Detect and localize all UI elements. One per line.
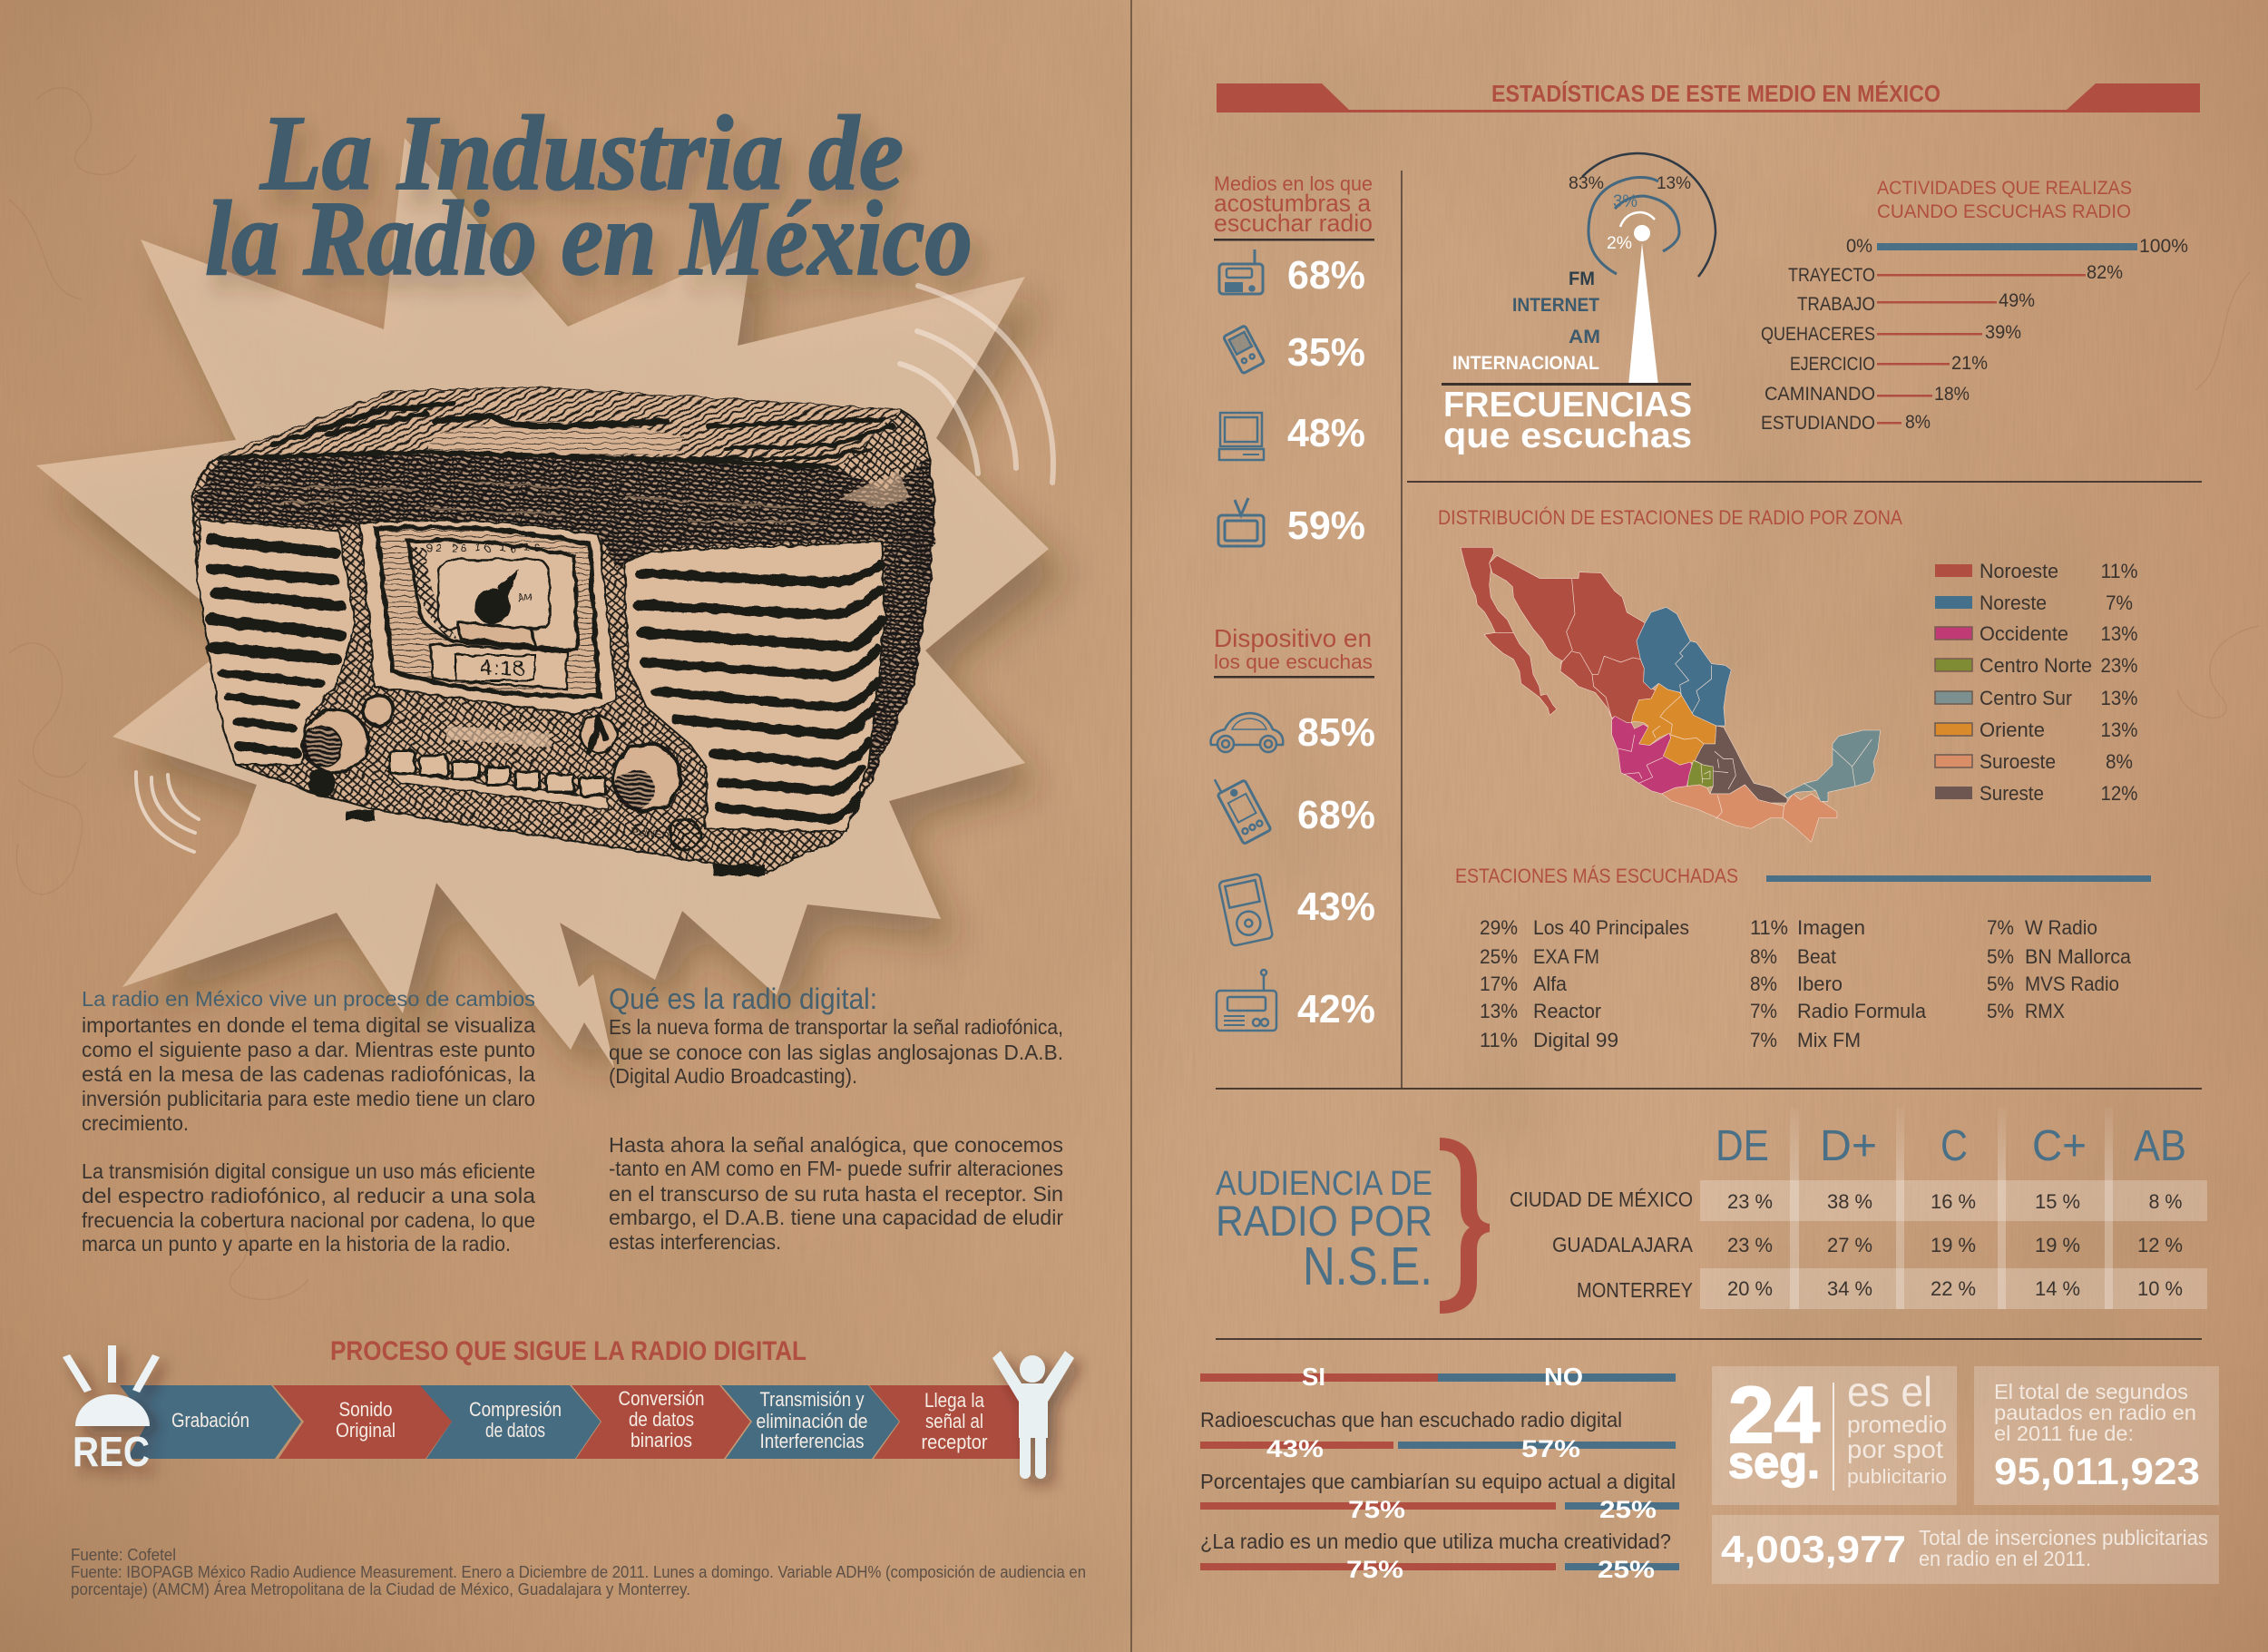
value: computer 48%: 48% xyxy=(1287,411,1365,455)
sound waves right xyxy=(900,286,1053,483)
chart: heard digital radio: Radioescuchas que han escuchado radio digital xyxy=(1200,1408,1622,1432)
map legend: Oriente xyxy=(1980,718,2045,741)
chart: frequency tower: que escuchas xyxy=(1443,416,1692,455)
callout: total insertions xyxy=(1712,1515,2219,1584)
icon: mobile xyxy=(1223,326,1265,374)
value: television 59%: 59% xyxy=(1287,503,1365,548)
chart: activities while listening: 0% xyxy=(1846,236,1872,257)
chart: would change equipment: 75% xyxy=(1348,1496,1405,1523)
map legend: Centro Norte xyxy=(1980,654,2092,677)
map legend: 23% xyxy=(2101,654,2137,677)
chart: activities while listening: CUANDO ESCUCHAS RADIO xyxy=(1877,201,2131,222)
chart: frequency tower: 83% xyxy=(1569,174,1604,193)
list: top stations: Radio Formula xyxy=(1797,1000,1927,1022)
chart: frequency tower: INTERNET xyxy=(1512,295,1599,316)
list: top stations: 25% xyxy=(1480,945,1518,968)
chart: activities while listening xyxy=(1761,178,2188,434)
map legend: 13% xyxy=(2101,718,2137,741)
callout: average seconds per spot xyxy=(1712,1366,1957,1505)
map legend: 12% xyxy=(2101,782,2137,805)
icon: REC light xyxy=(63,1345,160,1475)
callout: total seconds: El total de segundos xyxy=(1994,1380,2188,1403)
table: audience by NSE: 12 % xyxy=(2137,1234,2183,1256)
table: audience by NSE: 16 % xyxy=(1931,1190,1976,1213)
callout: average seconds per spot: promedio xyxy=(1847,1411,1947,1438)
chart: frequency tower: FM xyxy=(1569,269,1595,289)
table: audience by NSE: 14 % xyxy=(2035,1277,2080,1300)
list: top stations: 29% xyxy=(1480,916,1518,939)
list: top stations: 11% xyxy=(1750,916,1788,939)
list: top stations: 7% xyxy=(1987,916,2014,939)
heading: media xyxy=(1214,172,1374,241)
list: top stations: 13% xyxy=(1480,1000,1518,1022)
table: audience by NSE: 10 % xyxy=(2137,1277,2183,1300)
list: top stations: Imagen xyxy=(1797,916,1865,939)
heading: media: acostumbras a xyxy=(1214,190,1372,217)
chart: would change equipment: 25% xyxy=(1599,1496,1657,1523)
chart: activities while listening: 21% xyxy=(1951,353,1988,374)
callout: total insertions: Total de inserciones publicitarias xyxy=(1919,1526,2208,1549)
value: music player 43%: 43% xyxy=(1297,885,1375,929)
table: audience by NSE: 23 % xyxy=(1727,1190,1773,1213)
icon: mobile device xyxy=(1210,767,1271,844)
map legend: 11% xyxy=(2101,560,2137,582)
callout: total insertions: 4,003,977 xyxy=(1721,1528,1906,1570)
digital radio explanation: Hasta ahora la señal analógica, que conocemos xyxy=(609,1133,1063,1157)
digital radio explanation: que se conoce con las siglas anglosajonas D.A.B. xyxy=(609,1041,1063,1064)
process arrow chain: de datos xyxy=(629,1408,694,1431)
list: top stations: Mix FM xyxy=(1797,1029,1861,1051)
intro text column: La radio en México vive un proceso de cambios xyxy=(82,987,535,1011)
list: top stations: Digital 99 xyxy=(1533,1029,1618,1051)
list: top stations: Los 40 Principales xyxy=(1533,916,1689,939)
icon: portable radio xyxy=(1219,249,1263,294)
process arrow chain: Original xyxy=(336,1419,396,1442)
map legend: 13% xyxy=(2101,687,2137,709)
sources: porcentaje) (AMCM) Área Metropolitana de la Ciudad de México, Guadalajara y Monterrey. xyxy=(71,1580,690,1598)
list: top stations: 17% xyxy=(1480,973,1518,995)
icon: television xyxy=(1218,498,1264,546)
table: audience by NSE: AB xyxy=(2134,1122,2186,1170)
callout: total seconds xyxy=(1974,1366,2219,1505)
intro text column: como el siguiente paso a dar. Mientras este punto xyxy=(82,1038,535,1061)
table: audience by NSE: DE xyxy=(1716,1122,1769,1170)
value: mobile 35%: 35% xyxy=(1287,330,1365,375)
icon: brace xyxy=(1440,1138,1490,1314)
icon: computer xyxy=(1219,413,1264,460)
list: top stations: 7% xyxy=(1750,1029,1777,1051)
map legend xyxy=(1935,560,2137,805)
intro text column: crecimiento. xyxy=(82,1111,189,1135)
map legend: Suroeste xyxy=(1980,750,2056,773)
icon: music player xyxy=(1218,874,1273,946)
chart: activities while listening: ACTIVIDADES QUE REALIZAS xyxy=(1877,178,2132,199)
table: audience by NSE: 27 % xyxy=(1827,1234,1872,1256)
stats header banner: ESTADÍSTICAS DE ESTE MEDIO EN MÉXICO xyxy=(1491,80,1941,107)
heading: audience by NSE: N.S.E. xyxy=(1303,1237,1432,1296)
process arrow chain: Interferencias xyxy=(760,1430,864,1452)
icon: REC light: REC xyxy=(73,1428,150,1475)
process arrow chain xyxy=(120,1385,1020,1459)
chart: creativity xyxy=(1200,1530,1679,1583)
intro text column: del espectro radiofónico, al reducir a una sola xyxy=(82,1184,535,1207)
process arrow chain: Compresión xyxy=(469,1398,562,1421)
heading: station distribution: DISTRIBUCIÓN DE ESTACIONES DE RADIO POR ZONA xyxy=(1438,506,1902,529)
stats header banner xyxy=(1217,80,2200,112)
intro text column: frecuencia la cobertura nacional por cadena, lo que xyxy=(82,1208,535,1232)
chart: frequency tower: 3% xyxy=(1613,192,1637,211)
list: top stations: Reactor xyxy=(1533,1000,1601,1022)
chart: frequency tower xyxy=(1442,153,1716,455)
digital radio explanation: embargo, el D.A.B. tiene una capacidad de eludir xyxy=(609,1206,1063,1229)
intro text column: está en la mesa de las cadenas radiofónicas, la xyxy=(82,1062,535,1086)
title xyxy=(205,93,973,298)
chart: activities while listening: QUEHACERES xyxy=(1761,324,1875,345)
map legend: Occidente xyxy=(1980,622,2068,645)
process arrow chain: señal al xyxy=(925,1410,983,1432)
list: top stations: 5% xyxy=(1987,945,2014,968)
digital radio explanation: Qué es la radio digital: xyxy=(609,982,877,1015)
list: top stations: Alfa xyxy=(1533,973,1568,995)
list: top stations: 5% xyxy=(1987,973,2014,995)
heading: devices xyxy=(1214,624,1374,679)
illustration: vintage radio: POWER xyxy=(631,826,669,841)
table: audience by NSE: MONTERREY xyxy=(1577,1278,1693,1302)
sources: Fuente: IBOPAGB México Radio Audience Measurement. Enero a Diciembre de 2011. Lunes a domingo. Variable ADH% (composición de audiencia en xyxy=(71,1563,1086,1581)
process arrow chain: Llega la xyxy=(924,1389,985,1412)
chart: activities while listening: 82% xyxy=(2087,262,2123,283)
starburst behind radio xyxy=(36,138,1049,1068)
table: audience by NSE: 34 % xyxy=(1827,1277,1872,1300)
intro text column xyxy=(82,987,535,1256)
table: audience by NSE: 22 % xyxy=(1931,1277,1976,1300)
digital radio explanation: Es la nueva forma de transportar la señal radiofónica, xyxy=(609,1015,1063,1039)
table: audience by NSE: C+ xyxy=(2032,1122,2087,1170)
chart: creativity: 75% xyxy=(1346,1556,1403,1583)
list: top stations xyxy=(1480,916,2132,1051)
intro text column: inversión publicitaria para este medio tiene un claro xyxy=(82,1087,535,1110)
process arrow chain: Sonido xyxy=(339,1398,392,1421)
heading: audience by NSE: RADIO POR xyxy=(1216,1197,1432,1245)
value: mobile device 68%: 68% xyxy=(1297,793,1375,837)
value: car 85%: 85% xyxy=(1297,710,1375,755)
table: audience by NSE: CIUDAD DE MÉXICO xyxy=(1510,1188,1693,1211)
list: top stations: RMX xyxy=(2025,1000,2065,1022)
heading: audience by NSE xyxy=(1216,1165,1432,1296)
table: audience by NSE: 15 % xyxy=(2035,1190,2080,1213)
chart: creativity: 25% xyxy=(1598,1556,1655,1583)
list: top stations: 7% xyxy=(1750,1000,1777,1022)
chart: heard digital radio: 43% xyxy=(1266,1435,1324,1462)
table: audience by NSE: C xyxy=(1941,1122,1968,1170)
callout: average seconds per spot: por spot xyxy=(1847,1435,1943,1463)
heading: audience by NSE: AUDIENCIA DE xyxy=(1216,1165,1432,1203)
heading: devices: Dispositivo en xyxy=(1214,624,1372,652)
heading: top stations xyxy=(1455,865,2151,887)
chart: activities while listening: EJERCICIO xyxy=(1790,354,1875,375)
chart: heard digital radio xyxy=(1200,1408,1676,1462)
digital radio explanation: estas interferencias. xyxy=(609,1230,781,1254)
heading: media: escuchar radio xyxy=(1214,210,1373,237)
map legend: 8% xyxy=(2106,750,2133,773)
table: audience by NSE: 19 % xyxy=(2035,1234,2080,1256)
heading: top stations: ESTACIONES MÁS ESCUCHADAS xyxy=(1455,865,1738,887)
chart: activities while listening: 49% xyxy=(1999,290,2035,311)
table: audience by NSE: D+ xyxy=(1820,1122,1877,1170)
chart: would change equipment: Porcentajes que cambiarían su equipo actual a digital xyxy=(1200,1470,1676,1493)
table: audience by NSE: 23 % xyxy=(1727,1234,1773,1256)
chart: activities while listening: TRAYECTO xyxy=(1788,265,1875,286)
title: La Industria de xyxy=(259,93,904,212)
map legend: Centro Sur xyxy=(1980,687,2072,709)
chart: frequency tower: AM xyxy=(1569,327,1600,347)
list: top stations: 8% xyxy=(1750,945,1777,968)
chart: creativity: ¿La radio es un medio que utiliza mucha creatividad? xyxy=(1200,1530,1671,1553)
list: top stations: Ibero xyxy=(1797,973,1843,995)
callout: average seconds per spot: 24 xyxy=(1728,1370,1820,1460)
heading: media: Medios en los que xyxy=(1214,172,1373,195)
table: audience by NSE: 20 % xyxy=(1727,1277,1773,1300)
chart: yes/no legend: NO xyxy=(1544,1363,1583,1391)
illustration: vintage radio: 4:18 xyxy=(481,657,524,679)
value: table radio 42%: 42% xyxy=(1297,987,1375,1031)
callout: average seconds per spot: es el xyxy=(1847,1368,1932,1415)
chart: activities while listening: CAMINANDO xyxy=(1765,384,1875,405)
chart: heard digital radio: 57% xyxy=(1521,1435,1580,1462)
chart: activities while listening: 39% xyxy=(1985,322,2021,343)
process arrow chain: receptor xyxy=(922,1431,987,1453)
map legend: 13% xyxy=(2101,622,2137,645)
process arrow chain: eliminación de xyxy=(757,1410,867,1432)
chart: activities while listening: 8% xyxy=(1905,412,1931,433)
list: top stations: W Radio xyxy=(2025,916,2097,939)
icon: car xyxy=(1211,713,1283,752)
chart: activities while listening: 100% xyxy=(2139,236,2188,257)
chart: yes/no legend xyxy=(1200,1363,1676,1391)
sources xyxy=(71,1546,1086,1598)
title: la Radio en México xyxy=(205,179,973,298)
chart: frequency tower: FRECUENCIAS xyxy=(1443,386,1692,425)
chart: activities while listening: ESTUDIANDO xyxy=(1761,413,1875,434)
intro text column: importantes en donde el tema digital se visualiza xyxy=(82,1013,535,1037)
chart: activities while listening: 18% xyxy=(1934,384,1970,405)
illustration: vintage radio: TUNING xyxy=(653,738,689,770)
map legend: Noroeste xyxy=(1980,560,2058,582)
process arrow chain: Grabación xyxy=(171,1409,249,1432)
callout: total seconds: 95,011,923 xyxy=(1994,1450,2200,1492)
map legend: Noreste xyxy=(1980,591,2047,614)
callout: total insertions: en radio en el 2011. xyxy=(1919,1547,2091,1570)
chart: frequency tower: INTERNACIONAL xyxy=(1452,353,1599,374)
list: top stations: 8% xyxy=(1750,973,1777,995)
illustration: vintage radio: AM xyxy=(517,592,532,603)
illustration: vintage radio: 92 26 16 16 16 xyxy=(426,542,540,554)
callout: average seconds per spot: seg. xyxy=(1728,1437,1820,1488)
table: audience by NSE xyxy=(1510,1108,2207,1309)
digital radio explanation xyxy=(609,982,1063,1254)
callout: total seconds: pautados en radio en xyxy=(1994,1401,2196,1424)
list: top stations: MVS Radio xyxy=(2025,973,2119,995)
chart: would change equipment xyxy=(1200,1470,1679,1523)
list: top stations: 11% xyxy=(1480,1029,1518,1051)
list: top stations: EXA FM xyxy=(1533,945,1599,968)
sources: Fuente: Cofetel xyxy=(71,1546,176,1564)
digital radio explanation: en el transcurso de su ruta hasta el receptor. Sin xyxy=(609,1182,1063,1206)
illustration: vintage radio xyxy=(192,387,934,875)
heading: devices: los que escuchas xyxy=(1214,650,1373,673)
table: audience by NSE: 19 % xyxy=(1931,1234,1976,1256)
sound waves left xyxy=(136,772,199,852)
chart: frequency tower: 2% xyxy=(1607,234,1632,253)
callout: average seconds per spot: publicitario xyxy=(1847,1465,1947,1488)
table: audience by NSE: GUADALAJARA xyxy=(1552,1233,1694,1256)
process arrow chain: de datos xyxy=(485,1419,545,1442)
callout: total seconds: el 2011 fue de: xyxy=(1994,1422,2134,1445)
process arrow chain: binarios xyxy=(631,1429,692,1452)
map legend: 7% xyxy=(2106,591,2133,614)
icon: table radio xyxy=(1217,970,1276,1031)
digital radio explanation: (Digital Audio Broadcasting). xyxy=(609,1064,857,1088)
value: radio 68%: 68% xyxy=(1287,253,1365,298)
icon: receiver person xyxy=(992,1351,1074,1479)
chart: frequency tower: 13% xyxy=(1657,174,1691,193)
process arrow chain: Transmisión y xyxy=(760,1388,864,1411)
intro text column: marca un punto y aparte en la historia de la radio. xyxy=(82,1232,511,1256)
digital radio explanation: -tanto en AM como en FM- puede sufrir alteraciones xyxy=(609,1157,1063,1180)
table: audience by NSE: 8 % xyxy=(2148,1190,2183,1213)
chart: activities while listening: TRABAJO xyxy=(1797,294,1875,315)
chart: yes/no legend: SI xyxy=(1302,1363,1325,1391)
map of Mexico by zone xyxy=(1461,547,1881,842)
table: audience by NSE: 38 % xyxy=(1827,1190,1872,1213)
list: top stations: 5% xyxy=(1987,1000,2014,1022)
list: top stations: BN Mallorca xyxy=(2025,945,2132,968)
intro text column: La transmisión digital consigue un uso más eficiente xyxy=(82,1159,535,1183)
list: top stations: Beat xyxy=(1797,945,1836,968)
map legend: Sureste xyxy=(1980,782,2044,805)
process arrow chain: Conversión xyxy=(619,1387,704,1410)
process heading: PROCESO QUE SIGUE LA RADIO DIGITAL xyxy=(330,1336,807,1366)
